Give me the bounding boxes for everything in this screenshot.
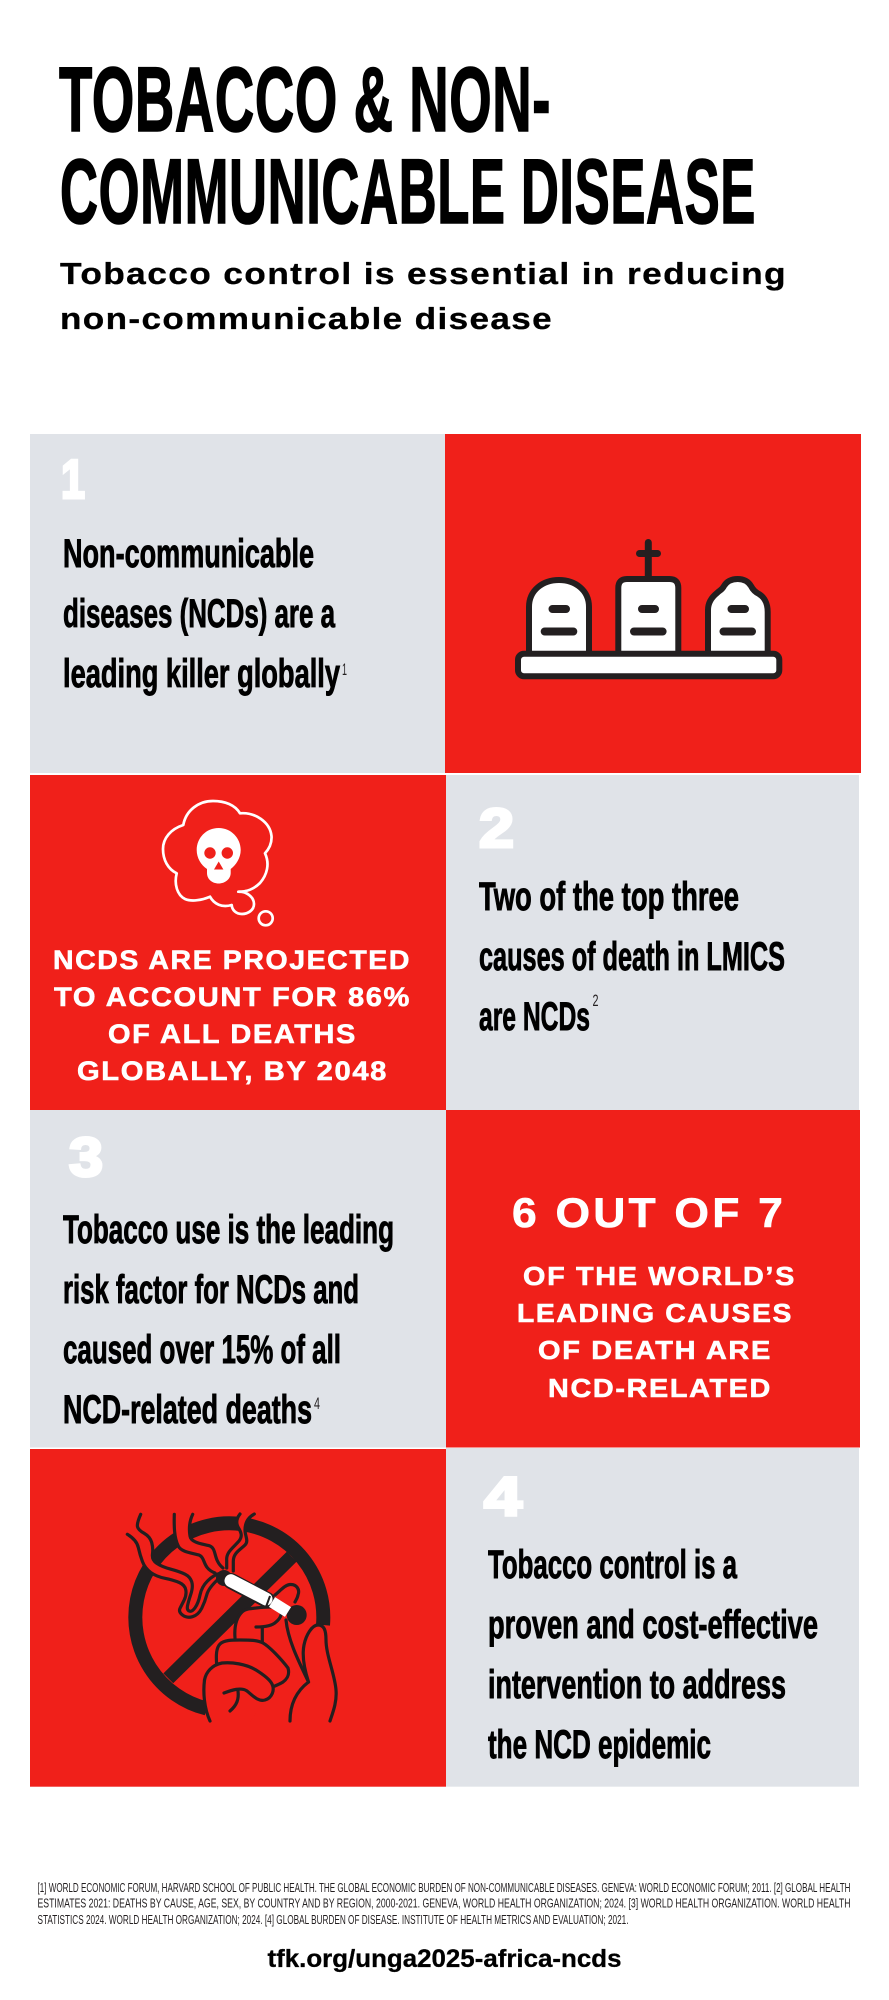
projection text: NCDS ARE PROJECTED [53,945,411,975]
gravestone right [708,579,768,656]
icon: thought bubble with skull [163,801,273,925]
number 2: 2 [479,797,514,859]
point 1 text: 1 [342,660,347,679]
point 4 text [488,1543,818,1767]
panel: 6 out of 7 stat [446,1110,860,1448]
icon: no smoking hand [127,1514,336,1722]
stat caption: LEADING CAUSES [517,1298,793,1328]
prohibition sign [135,1523,323,1708]
cigarette [216,1570,307,1625]
point 4 text: Tobacco control is a [488,1543,737,1587]
stat caption: OF THE WORLD’S [523,1261,796,1291]
point 3 text: NCD-related deaths [63,1388,312,1432]
point 4 text: the NCD epidemic [488,1723,711,1767]
icon: gravestones [518,542,779,676]
number 3: 3 [69,1126,103,1188]
projection text [53,945,411,1086]
projection text: GLOBALLY, BY 2048 [77,1056,388,1086]
number 4: 4 [484,1465,523,1527]
subtitle [60,256,787,336]
point 2 text: are NCDs [479,995,590,1039]
panel: no smoking [30,1449,446,1787]
panel: point 3 [30,1110,446,1448]
panel: gravestones [445,434,861,773]
panel: point 1 [30,434,445,773]
source url: tfk.org/unga2025-africa-ncds [268,1945,622,1973]
panel: projection stat [30,775,446,1110]
subtitle: non-communicable disease [60,301,553,336]
point 1 text: leading killer globally [63,652,341,696]
point 3 text: risk factor for NCDs and [63,1268,359,1312]
references [38,1881,850,1927]
gravestone centre with cross [618,542,678,656]
smoke [127,1514,254,1617]
hand fingers [204,1607,336,1722]
point 1 text: diseases (NCDs) are a [63,592,335,636]
big stat: 6 OUT OF 7 [512,1189,786,1236]
projection text: TO ACCOUNT FOR 86% [54,982,411,1012]
point 1 text: Non-communicable [63,532,314,576]
point 3 text: 4 [314,1394,320,1413]
stat caption [517,1261,796,1403]
point 2 text: Two of the top three [479,875,739,919]
gravestone left [529,580,589,656]
point 1 text [63,532,347,696]
point 3 text [63,1208,394,1432]
back finger [275,1584,299,1602]
number 1: 1 [61,448,85,510]
title: TOBACCO & NON- [59,49,551,151]
point 2 text [479,875,785,1039]
stat caption: OF DEATH ARE [538,1335,772,1365]
subtitle: Tobacco control is essential in reducing [60,256,787,291]
panel: point 2 [446,775,859,1110]
point 3 text: Tobacco use is the leading [63,1208,394,1252]
point 3 text: caused over 15% of all [63,1328,341,1372]
gravestone base [518,654,779,676]
panel: point 4 [446,1448,859,1787]
projection text: OF ALL DEATHS [108,1019,357,1049]
title [59,49,756,243]
point 2 text: 2 [592,991,598,1010]
stat caption: NCD-RELATED [548,1373,772,1403]
